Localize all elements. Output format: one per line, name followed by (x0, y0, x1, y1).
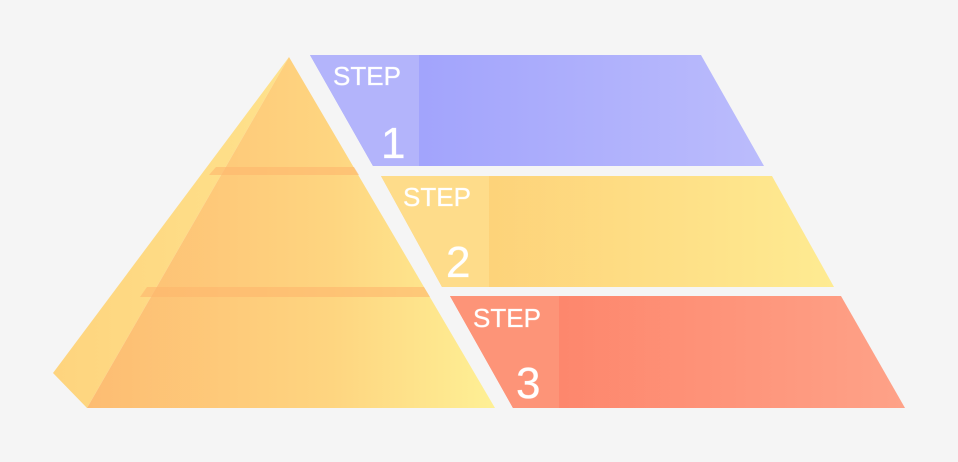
panel: step 1 (310, 55, 764, 168)
panel: step 3 (450, 296, 905, 408)
pyramid (53, 57, 495, 408)
panel: step 3: STEP (473, 303, 541, 333)
panel: step 2: 2 (446, 238, 470, 287)
panel: step 3: 3 (516, 359, 540, 408)
panel: step 2 (381, 176, 834, 287)
panel: step 1: 1 (381, 119, 405, 168)
panel: step 1: STEP (333, 61, 401, 91)
panel: step 2: STEP (403, 182, 471, 212)
